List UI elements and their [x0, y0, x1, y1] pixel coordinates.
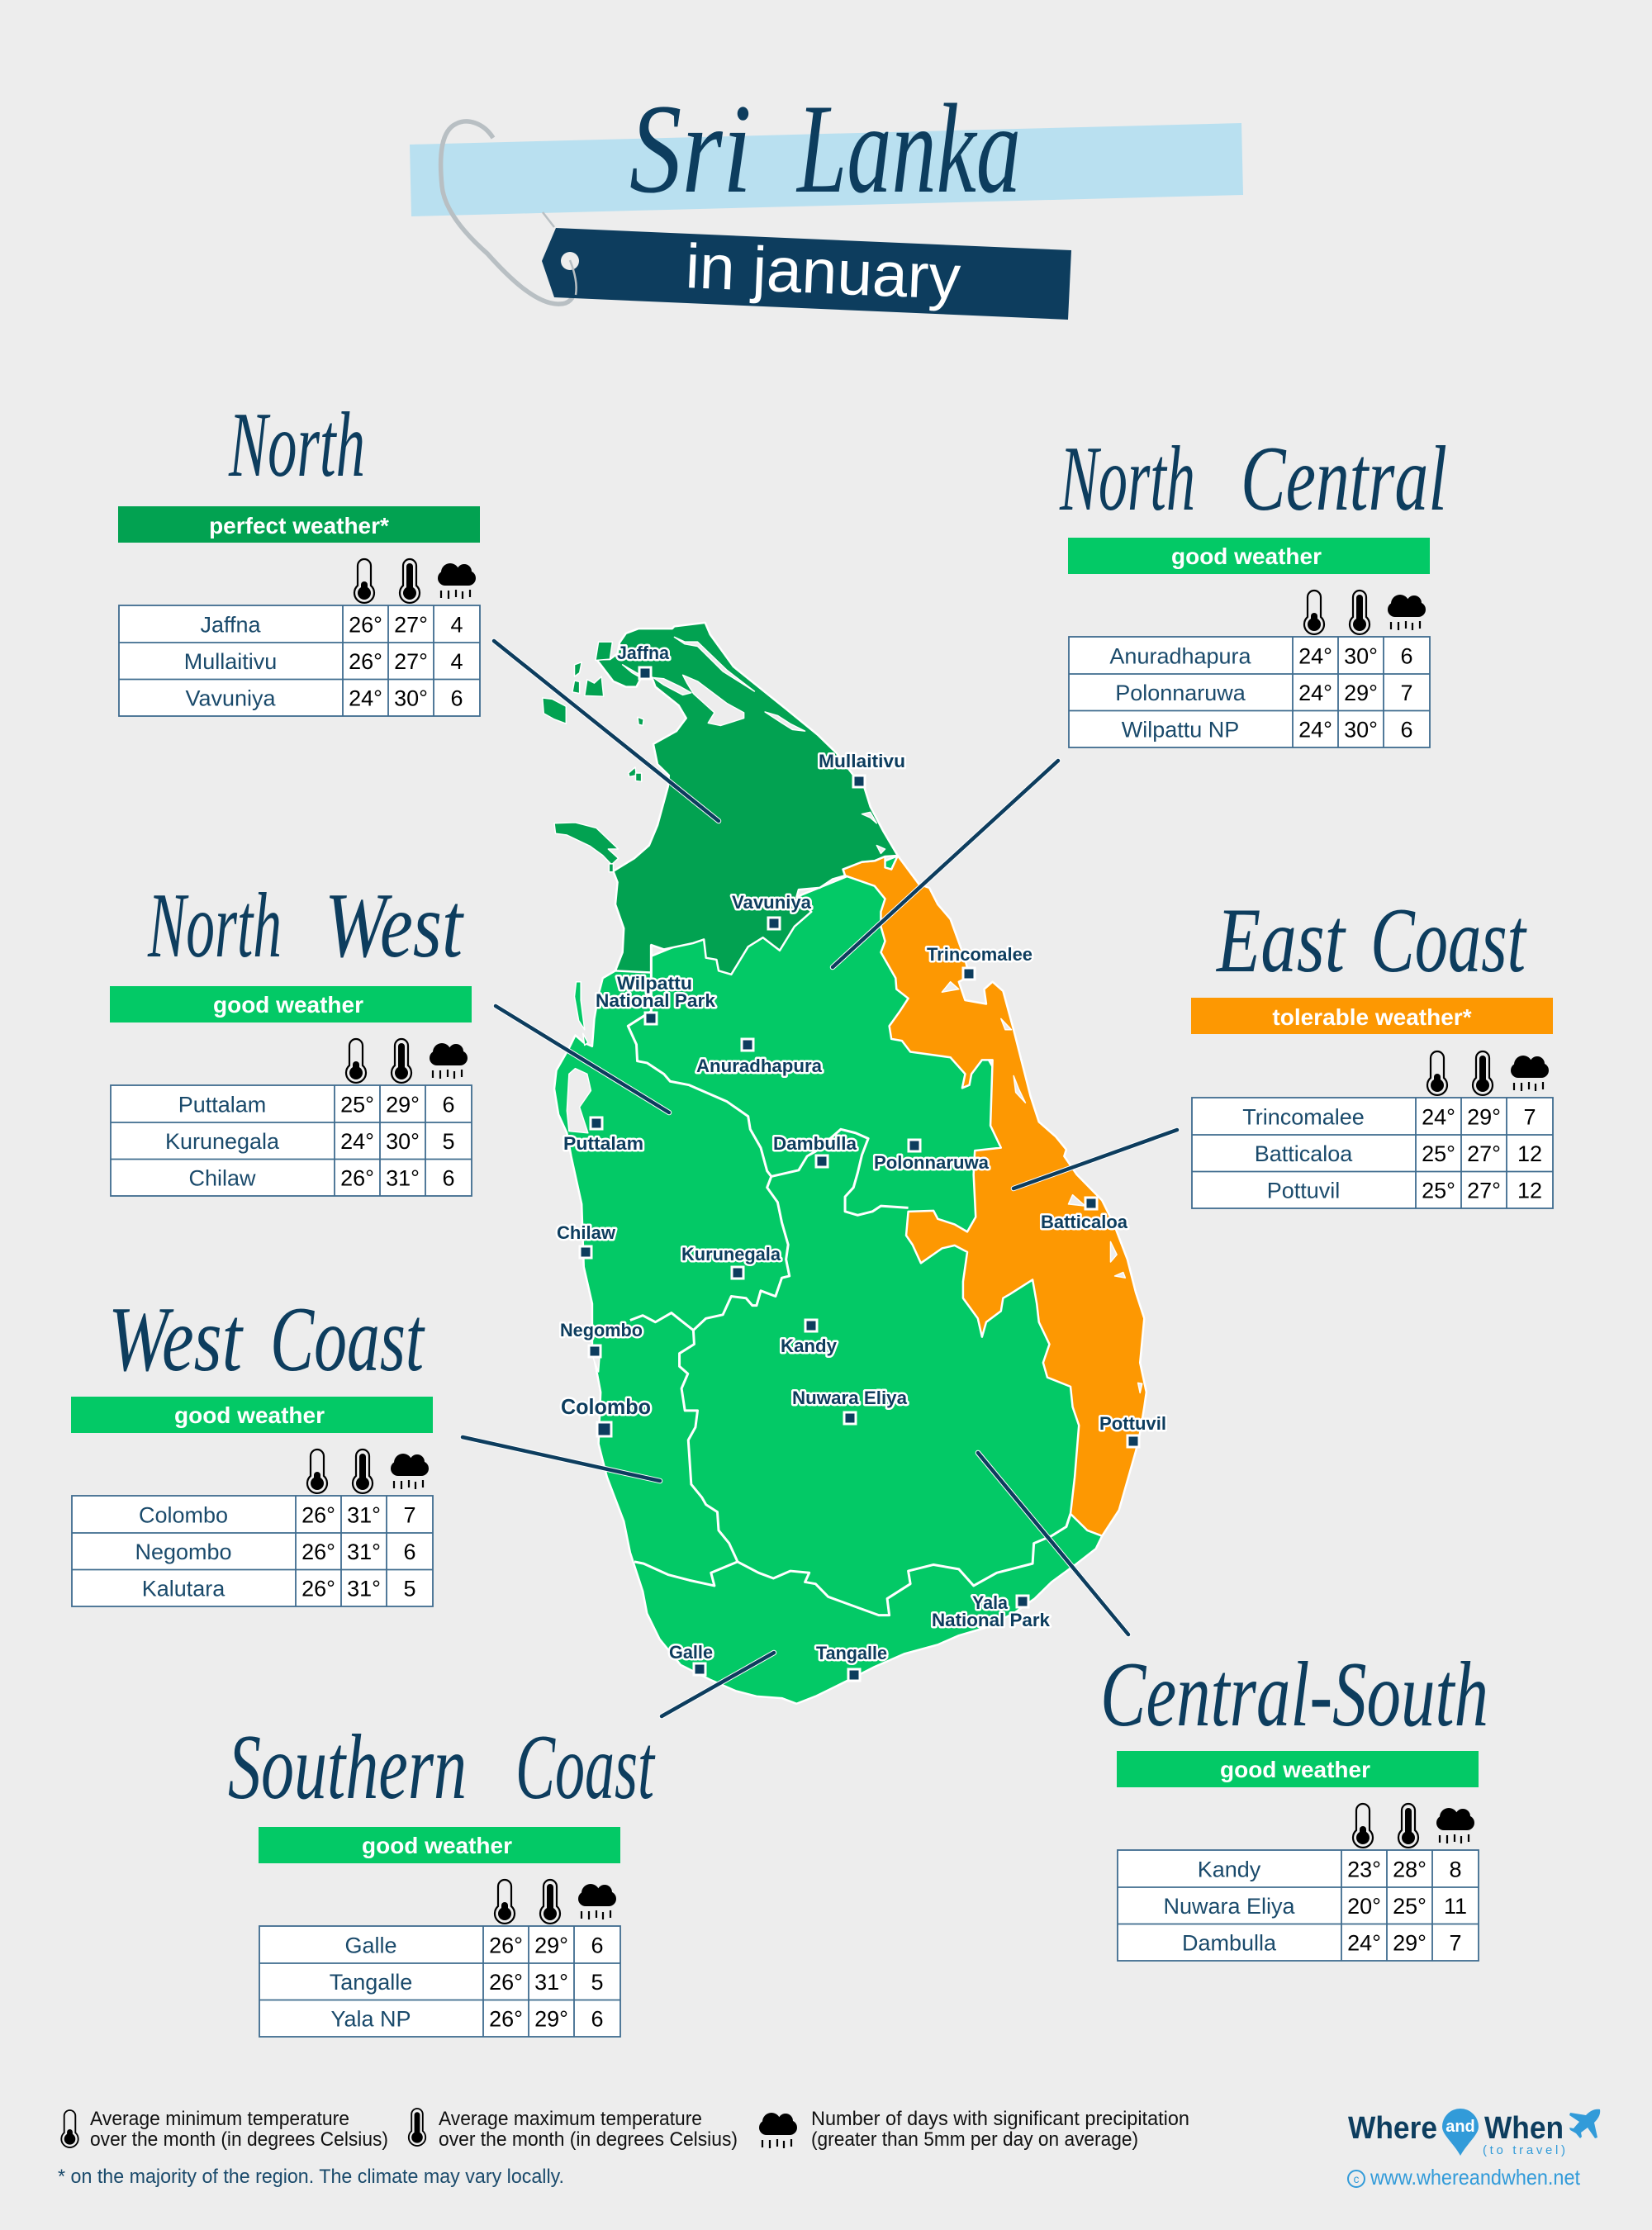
heading: North: North: [228, 393, 365, 496]
weather bar: [1191, 998, 1553, 1034]
panel: Central-South: [1100, 1643, 1488, 1961]
column icons: [346, 1039, 468, 1083]
table: [1069, 637, 1430, 747]
weather bar: good weather: [213, 992, 363, 1018]
heading: North West: West: [325, 874, 464, 977]
table: 6: [450, 686, 463, 710]
panel: North Central: [1059, 427, 1447, 747]
footnote: * on the majority of the region. The climate may vary locally.: [58, 2166, 564, 2188]
table: Jaffna: [200, 613, 262, 638]
panel: North: [118, 393, 480, 716]
table: 27°: [1467, 1178, 1501, 1203]
logo: Where and When: Where: [1348, 2111, 1437, 2146]
city labels: Pottuvil: [1099, 1413, 1166, 1434]
panel: East Coast: [1191, 889, 1553, 1208]
table: 26°: [340, 1166, 374, 1191]
weather bar: good weather: [362, 1833, 512, 1858]
city labels: National Park: [932, 1610, 1051, 1630]
table: 29°: [386, 1092, 420, 1117]
table: 5: [442, 1129, 455, 1154]
city labels: Polonnaruwa: [874, 1152, 990, 1173]
table: [111, 1085, 472, 1196]
table: 26°: [301, 1576, 335, 1601]
heading: East Coast: Coast: [1370, 889, 1527, 992]
table: 12: [1517, 1178, 1542, 1203]
city labels: Nuwara Eliya: [792, 1388, 908, 1408]
heading: Southern Coast: Southern: [228, 1715, 467, 1819]
city labels: Anuradhapura: [696, 1056, 823, 1076]
legend text: precipitation: Number of days with significant precipitation: [811, 2108, 1189, 2130]
city labels: Wilpattu: [617, 973, 692, 994]
table: 26°: [301, 1540, 335, 1564]
legend text: maximum: over the month (in degrees Celsius): [439, 2128, 738, 2151]
heading: North West: North: [147, 874, 282, 977]
table: 27°: [394, 649, 428, 674]
table: 6: [442, 1092, 455, 1117]
table: [1192, 1098, 1553, 1208]
heading: West Coast: West: [108, 1288, 244, 1391]
tag string: [441, 121, 575, 304]
table: Yala NP: [330, 2007, 411, 2032]
website: www.whereandwhen.net: [1370, 2165, 1581, 2190]
heading: North Central: North: [1059, 427, 1195, 530]
table: 7: [1400, 681, 1413, 705]
logo: Where and When: (to travel): [1483, 2143, 1565, 2157]
table: 24°: [1298, 681, 1332, 705]
table: 23°: [1347, 1857, 1381, 1881]
column icons: [1427, 1051, 1549, 1095]
title text: Sri Lanka: [629, 78, 1021, 220]
table: Mullaitivu: [184, 649, 277, 674]
city labels: Mullaitivu: [819, 751, 905, 771]
heading: East Coast: East: [1215, 889, 1346, 992]
west and east lagoons: [567, 982, 1142, 1393]
table: 31°: [386, 1166, 420, 1191]
column icons: [1353, 1804, 1474, 1848]
heading: West Coast: Coast: [270, 1288, 425, 1391]
legend text: minimum: over the month (in degrees Celsius): [90, 2128, 388, 2151]
map of Sri Lanka: [543, 623, 1146, 1704]
logo: Where and When: When: [1484, 2111, 1564, 2146]
table: [259, 1926, 620, 2037]
table: Kandy: [1198, 1857, 1261, 1881]
table: Kurunegala: [165, 1129, 280, 1154]
table: 5: [591, 1970, 604, 1995]
city labels: Trincomalee: [927, 944, 1032, 965]
region: east coast orange: [843, 856, 1146, 1536]
table: Pottuvil: [1267, 1178, 1340, 1203]
table: 27°: [1467, 1141, 1501, 1166]
legend text: minimum: [90, 2108, 388, 2151]
table: 8: [1449, 1857, 1462, 1881]
table: 7: [1523, 1105, 1536, 1130]
weather bar: [71, 1397, 433, 1433]
icon: minimum temperature: [61, 2110, 78, 2147]
table: 24°: [349, 686, 382, 710]
city markers: [580, 667, 1139, 1681]
table: 26°: [489, 1970, 523, 1995]
logo: Where and When: [1348, 2109, 1600, 2190]
icon: rain: [759, 2113, 797, 2148]
subtitle text: in january: [684, 231, 962, 313]
table: 7: [403, 1503, 416, 1528]
table: Puttalam: [178, 1092, 266, 1117]
table: 24°: [1298, 717, 1332, 742]
table: Negombo: [135, 1540, 232, 1564]
table: 25°: [1393, 1894, 1427, 1919]
heading: North Central: [1059, 427, 1447, 530]
column icons: [495, 1880, 616, 1924]
table: 26°: [489, 1933, 523, 1957]
table: 24°: [340, 1129, 374, 1154]
legend text: precipitation: (greater than 5mm per day on average): [811, 2128, 1138, 2151]
table: 29°: [534, 2007, 568, 2032]
weather bar: good weather: [174, 1402, 325, 1428]
table: 7: [1449, 1931, 1462, 1956]
table: Dambulla: [1182, 1931, 1277, 1956]
city labels: Dambulla: [773, 1133, 857, 1154]
table: 31°: [347, 1503, 381, 1528]
table: 25°: [1422, 1141, 1455, 1166]
city labels: [557, 643, 1166, 1663]
table: 24°: [1347, 1931, 1381, 1956]
weather bar: [1068, 538, 1430, 574]
table: [72, 1496, 433, 1606]
weather bar: tolerable weather*: [1272, 1004, 1472, 1030]
table: Trincomalee: [1242, 1105, 1365, 1130]
column icons: [1304, 591, 1426, 634]
table: 11: [1444, 1894, 1467, 1919]
table: 4: [450, 613, 463, 638]
weather bar: good weather: [1171, 543, 1322, 569]
table: 25°: [340, 1092, 374, 1117]
table: 29°: [1344, 681, 1378, 705]
table: 5: [403, 1576, 416, 1601]
region: central and coastal green: [554, 856, 1123, 1704]
table: 6: [1400, 644, 1413, 669]
table: 26°: [489, 2007, 523, 2032]
table: 31°: [347, 1576, 381, 1601]
logo: Where and When: and: [1446, 2118, 1475, 2136]
table: 31°: [347, 1540, 381, 1564]
panel: West Coast: [71, 1288, 433, 1606]
heading: West Coast: [108, 1288, 425, 1391]
title text: Sri Lanka: Sri: [629, 78, 752, 220]
table: 30°: [386, 1129, 420, 1154]
city labels: Jaffna: [617, 643, 670, 663]
table: Polonnaruwa: [1115, 681, 1246, 705]
table: 31°: [534, 1970, 568, 1995]
table: 26°: [349, 649, 382, 674]
city labels: Vavuniya: [732, 892, 812, 913]
north lagoons and islands: [543, 637, 885, 872]
city labels: National Park: [596, 990, 716, 1011]
heading: North West: [147, 874, 464, 977]
table: 24°: [1422, 1105, 1455, 1130]
table: 12: [1517, 1141, 1542, 1166]
table: 30°: [394, 686, 428, 710]
region borders: [628, 945, 1070, 1616]
table: Batticaloa: [1255, 1141, 1353, 1166]
city labels: Yala: [972, 1592, 1009, 1613]
city labels: Galle: [669, 1642, 713, 1663]
table: 27°: [394, 613, 428, 638]
icon: airplane: [1569, 2109, 1600, 2138]
heading: East Coast: [1215, 889, 1527, 992]
table: 20°: [1347, 1894, 1381, 1919]
city labels: Negombo: [560, 1320, 643, 1340]
table: 26°: [349, 613, 382, 638]
panel: Southern Coast: [228, 1715, 656, 2037]
legend text: precipitation: [811, 2108, 1189, 2151]
weather bar: [259, 1827, 620, 1863]
column icons: [354, 559, 476, 603]
weather bar: [110, 986, 472, 1022]
region: north dark green: [596, 623, 898, 975]
weather bar: [1117, 1751, 1479, 1787]
panel: North West: [110, 874, 472, 1196]
table: 28°: [1393, 1857, 1427, 1881]
legend text: maximum: Average maximum temperature: [439, 2108, 702, 2130]
table: 6: [442, 1166, 455, 1191]
table: 29°: [534, 1933, 568, 1957]
table: 24°: [1298, 644, 1332, 669]
table: 6: [591, 1933, 604, 1957]
table: 25°: [1422, 1178, 1455, 1203]
subtitle tag: [542, 212, 1071, 320]
city labels: Chilaw: [557, 1222, 616, 1243]
table: 30°: [1344, 644, 1378, 669]
city labels: Tangalle: [816, 1643, 887, 1663]
table: 6: [591, 2007, 604, 2032]
table: Chilaw: [188, 1166, 256, 1191]
table: 4: [450, 649, 463, 674]
city labels: Kurunegala: [681, 1244, 781, 1264]
weather bar: [118, 506, 480, 543]
table: 29°: [1393, 1931, 1427, 1956]
table: 30°: [1344, 717, 1378, 742]
table: 6: [403, 1540, 416, 1564]
table: 6: [1400, 717, 1413, 742]
title banner: [410, 78, 1243, 304]
table: Tangalle: [330, 1970, 412, 1995]
table: Kalutara: [142, 1576, 225, 1601]
city labels: Puttalam: [563, 1133, 643, 1154]
icon: maximum temperature: [409, 2109, 425, 2146]
heading: North Central: Central: [1241, 427, 1447, 530]
heading: Central-South: Central-South: [1100, 1643, 1488, 1746]
table: Vavuniya: [185, 686, 277, 710]
column icons: [307, 1450, 429, 1493]
weather bar: good weather: [1220, 1757, 1370, 1782]
legend: [61, 2108, 1189, 2151]
table: Galle: [344, 1933, 397, 1957]
table: 29°: [1467, 1105, 1501, 1130]
legend text: maximum: [439, 2108, 738, 2151]
table: Colombo: [139, 1503, 228, 1528]
legend text: minimum: Average minimum temperature: [90, 2108, 349, 2130]
heading: Southern Coast: [228, 1715, 656, 1819]
heading: Southern Coast: Coast: [515, 1715, 656, 1819]
table: [119, 605, 480, 716]
table: Wilpattu NP: [1122, 717, 1239, 742]
table: [1118, 1850, 1479, 1961]
table: Nuwara Eliya: [1163, 1894, 1296, 1919]
table: 26°: [301, 1503, 335, 1528]
leader lines: [463, 641, 1177, 1716]
title text: Sri Lanka: Lanka: [795, 78, 1021, 220]
city labels: Batticaloa: [1041, 1212, 1128, 1232]
city labels: Colombo: [561, 1394, 651, 1419]
icon: map pin: [1442, 2109, 1479, 2156]
table: Anuradhapura: [1109, 644, 1252, 669]
weather bar: perfect weather*: [209, 513, 389, 539]
website: c: [1353, 2172, 1360, 2185]
city labels: Kandy: [781, 1336, 838, 1356]
